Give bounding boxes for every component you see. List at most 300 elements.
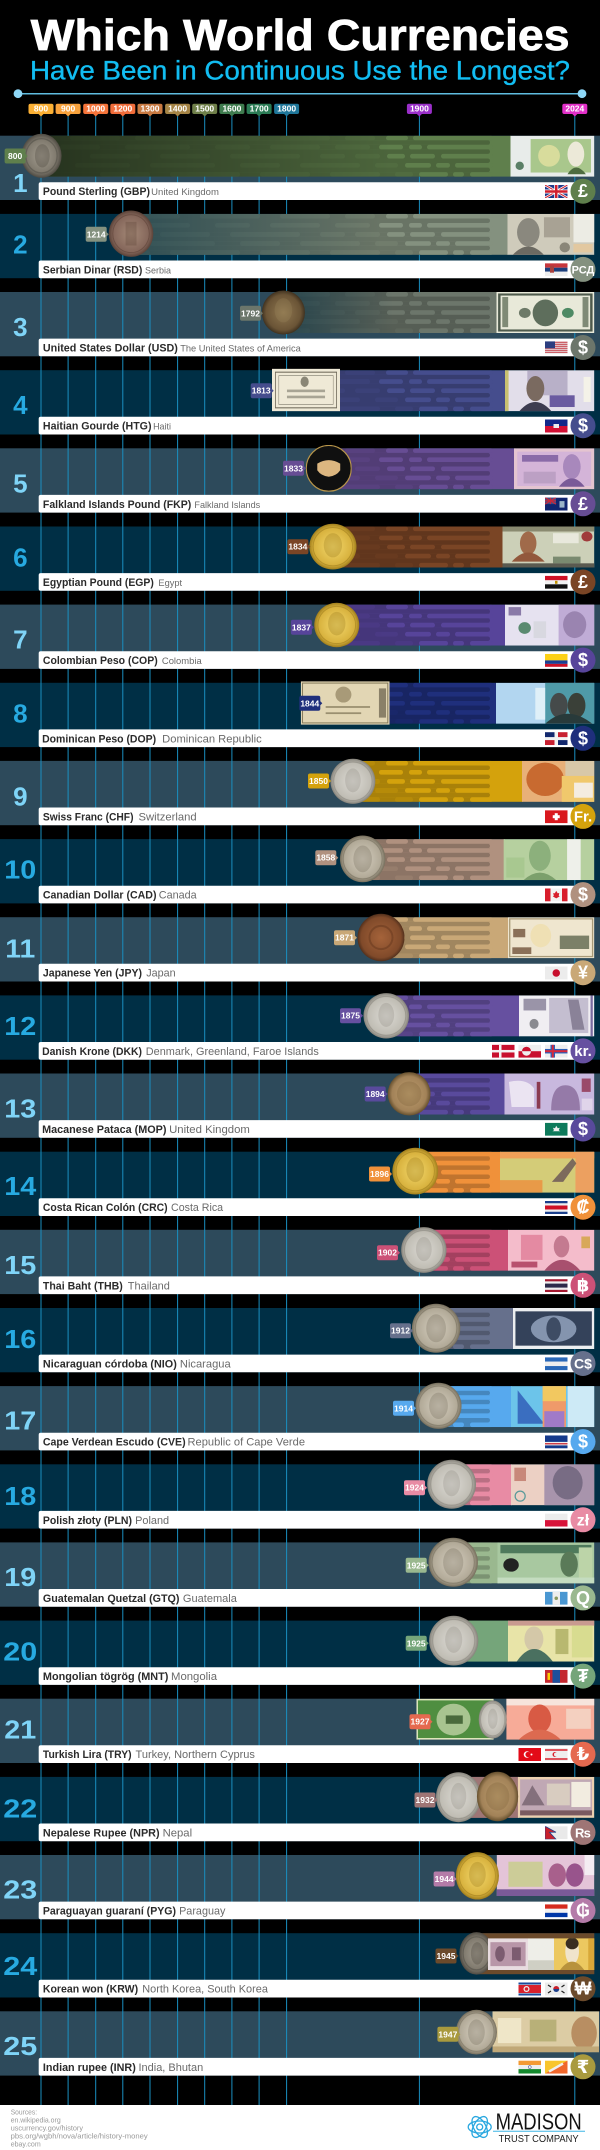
country: Egypt (158, 578, 182, 589)
rank number: 8 (13, 699, 28, 729)
timeline year tags: 1900 (410, 104, 429, 114)
label bar (39, 2054, 595, 2079)
currency name: Egyptian Pound (EGP) (43, 577, 154, 589)
row 7: Colombian Peso (0, 603, 600, 673)
currency name: Falkland Islands Pound (FKP) (43, 499, 192, 511)
bar (372, 839, 505, 880)
currency name: Serbian Dinar (RSD) (43, 264, 143, 276)
country: United Kingdom (169, 1124, 250, 1136)
timeline year tags: 1000 (86, 104, 105, 114)
row 2: Serbian Dinar (0, 210, 600, 282)
bar (140, 214, 508, 255)
timeline year tags (28, 104, 587, 116)
label bar (39, 1664, 595, 1689)
flag (545, 732, 568, 745)
coin (459, 1932, 494, 1975)
currency name: Cape Verdean Escudo (CVE) (43, 1437, 186, 1449)
year tag: 1792 (241, 308, 260, 318)
bar (448, 1386, 512, 1428)
currency name: Polish złoty (PLN) (43, 1515, 132, 1527)
year tag: 1813 (252, 386, 271, 396)
rank number: 9 (13, 781, 28, 811)
rank number: 25 (3, 2031, 37, 2061)
country: North Korea, South Korea (142, 1984, 269, 1996)
currency symbol (570, 335, 596, 360)
row 6: Egyptian Pound (0, 524, 600, 594)
flag (545, 341, 568, 354)
coin (357, 914, 405, 961)
currency name: Danish Krone (DKK) (42, 1046, 142, 1058)
country: Republic of Cape Verde (188, 1437, 305, 1449)
year tag: 800 (8, 151, 22, 161)
flag (545, 1123, 568, 1136)
row 23: Paraguayan guaraní (3, 1852, 596, 1923)
year tag (240, 306, 263, 321)
currency symbol: Fr. (574, 808, 592, 825)
year tag: 1833 (284, 463, 303, 473)
bar (453, 1621, 509, 1662)
banknote (504, 839, 594, 880)
currency symbol: ₮ (578, 1666, 588, 1686)
sources: ebay.com (11, 2140, 41, 2148)
year tag: 1914 (394, 1403, 413, 1413)
currency name: Guatemalan Quetzal (GTQ) (43, 1593, 180, 1605)
timeline year tags: 1500 (195, 104, 214, 114)
first banknote (416, 1699, 494, 1740)
coin (412, 1304, 460, 1353)
logo wordmark: MADISON (496, 2108, 582, 2134)
coin (309, 524, 357, 570)
year tag (86, 227, 109, 242)
row 5: Falkland Islands Pound (0, 445, 600, 516)
flags (518, 2061, 568, 2074)
currency symbol (570, 179, 596, 204)
coin (314, 603, 359, 647)
banknote (505, 604, 594, 646)
coin (306, 445, 351, 491)
flag (545, 810, 568, 823)
country: Turkey, Northern Cyprus (136, 1749, 255, 1761)
year tag (287, 539, 310, 554)
rank number: 18 (4, 1481, 36, 1511)
currency name: Turkish Lira (TRY) (43, 1749, 132, 1761)
currency name: Nepalese Rupee (NPR) (43, 1827, 160, 1839)
year tag: 1858 (316, 853, 336, 863)
country: Guatemala (183, 1593, 238, 1605)
timeline year tags: 1800 (277, 104, 296, 114)
label bar (39, 726, 595, 751)
banknotes (488, 1938, 594, 1970)
currency symbol (570, 804, 596, 829)
currency symbol: ¥ (578, 963, 588, 983)
sources: en.wikipedia.org (11, 2115, 61, 2124)
year tag (434, 1872, 457, 1886)
flag (545, 966, 568, 980)
year tag (436, 1948, 458, 1964)
country: Denmark, Greenland, Faroe Islands (146, 1046, 319, 1058)
year tag (404, 1480, 427, 1495)
sources (11, 2107, 148, 2148)
currency name: Nicaraguan córdoba (NIO) (43, 1358, 177, 1370)
year tag: 1912 (391, 1326, 410, 1336)
rank number: 10 (4, 854, 36, 884)
rank number: 2 (13, 230, 28, 260)
year tag: 1871 (335, 933, 354, 943)
bar (416, 1074, 504, 1114)
year tag: 1894 (366, 1089, 385, 1099)
first banknote (300, 681, 390, 725)
rank number: 17 (4, 1405, 36, 1435)
banknote (511, 1386, 594, 1428)
rank number: 20 (3, 1637, 37, 1667)
logo tagline: TRUST COMPANY (499, 2134, 579, 2145)
label bar (39, 570, 595, 594)
label bar (39, 1585, 595, 1610)
label bar (39, 491, 595, 516)
currency symbol: ₲ (576, 1900, 590, 1920)
label bar (39, 1507, 595, 1532)
year tag: 1214 (87, 229, 106, 239)
year tag: 1932 (416, 1795, 435, 1805)
rank number: 14 (4, 1171, 37, 1201)
rank number: 5 (13, 468, 28, 498)
flags (518, 1982, 568, 1996)
label bar (39, 179, 595, 204)
currency name: Pound Sterling (GBP) (43, 186, 150, 198)
year tag: 1834 (288, 542, 308, 552)
rank number: 22 (3, 1793, 37, 1823)
label bar (39, 1273, 595, 1298)
flag (545, 888, 568, 901)
coin (330, 759, 375, 804)
label bar (39, 960, 595, 985)
sources: pbs.org/wgbh/nova/article/history-money (11, 2132, 148, 2140)
country: Nepal (163, 1827, 192, 1839)
currency name: Paraguayan guaraní (PYG) (43, 1906, 176, 1918)
label bar (39, 804, 595, 829)
rank number: 15 (4, 1250, 36, 1280)
currency symbol: ₨ (575, 1825, 591, 1840)
currency symbol: ₩ (574, 1979, 592, 1999)
flag (545, 1279, 568, 1292)
currency symbol (570, 648, 596, 673)
coin (109, 210, 153, 257)
year tag (369, 1166, 392, 1182)
banknote (496, 682, 594, 724)
banknote (497, 1855, 594, 1896)
currency name: Japanese Yen (JPY) (43, 968, 142, 980)
year tag: 1925 (407, 1638, 426, 1648)
rank number: 4 (13, 390, 28, 420)
currency name: United States Dollar (USD) (43, 342, 178, 354)
row 13: Macanese Pataca (0, 1072, 600, 1142)
currency symbol (570, 726, 596, 751)
coin (429, 1538, 478, 1587)
banknote (508, 1230, 594, 1271)
currency symbol (570, 2054, 596, 2079)
currency name: Mongolian tögrög (MNT) (43, 1671, 169, 1683)
row 22: Nepalese Rupee (3, 1772, 596, 1845)
rank number: 3 (13, 312, 28, 342)
flag (545, 498, 568, 511)
year tag (299, 696, 322, 711)
year tag (291, 620, 314, 635)
rank number: 23 (3, 1874, 37, 1904)
flag (545, 576, 568, 589)
currency symbol: ₡ (576, 1197, 590, 1217)
banknote (508, 1621, 594, 1662)
bar (424, 1152, 501, 1193)
currency symbol (570, 1507, 596, 1532)
currency symbol: ₺ (577, 1744, 590, 1764)
country: United Kingdom (151, 187, 219, 198)
currency symbol (570, 491, 596, 516)
currency symbol: $ (578, 1432, 588, 1452)
country: Switzerland (138, 811, 197, 823)
year tag: 1924 (405, 1483, 424, 1493)
timeline rule (14, 89, 586, 98)
currency symbol (570, 1664, 596, 1689)
currency symbol: ฿ (577, 1275, 589, 1295)
logo: Madison Trust Company (468, 2108, 585, 2145)
coin (456, 1852, 499, 1900)
banknote (506, 1699, 594, 1740)
flag (545, 1435, 568, 1448)
timeline year tags: 1300 (141, 104, 160, 114)
row 11: Japanese Yen (0, 914, 600, 985)
timeline year tags: 2024 (565, 104, 585, 114)
banknote (514, 448, 594, 490)
flag (545, 1514, 568, 1527)
currency symbol: zł (577, 1512, 590, 1529)
label bar (39, 335, 595, 360)
banknote (498, 1542, 594, 1584)
label bar (39, 1742, 595, 1767)
timeline year tags: 1200 (113, 104, 133, 114)
year tag: 1945 (437, 1951, 456, 1961)
row 17: Cape Verdean Escudo (0, 1383, 600, 1454)
country: Dominican Republic (162, 733, 262, 745)
banknote (496, 292, 594, 333)
banknote (502, 526, 594, 568)
bar (390, 682, 500, 724)
coin (363, 993, 409, 1039)
flags (492, 1045, 568, 1058)
currency symbol (570, 1585, 596, 1610)
country: Colombia (162, 656, 202, 667)
logo rule (493, 2130, 585, 2132)
flag (545, 420, 568, 432)
currency name: Haitian Gourde (HTG) (43, 421, 152, 433)
currency symbol: $ (578, 728, 588, 748)
row 25: Indian rupee (3, 2010, 599, 2079)
logo icon (468, 2114, 491, 2140)
label bar (39, 1351, 595, 1376)
banknote (504, 1074, 594, 1114)
label bar (39, 1820, 595, 1845)
timeline year tags: 800 (34, 104, 48, 114)
country: Serbia (145, 265, 172, 276)
bar (346, 604, 507, 646)
banknote (510, 136, 594, 177)
bar (466, 1542, 499, 1584)
currency symbol: £ (578, 572, 588, 592)
year tag: 1944 (435, 1874, 454, 1884)
rank number: 24 (3, 1951, 38, 1981)
currency symbol: $ (578, 338, 588, 358)
sources: Sources: (11, 2107, 37, 2116)
row 1: Pound Sterling (0, 134, 600, 204)
row 10: Canadian Dollar (0, 835, 600, 907)
year tag: 1837 (292, 622, 311, 632)
year tag (406, 1558, 429, 1573)
rank number: 11 (5, 933, 35, 963)
banknote (508, 214, 594, 255)
year tag (334, 930, 357, 945)
row 24: Korean won (3, 1932, 596, 2001)
year tag (308, 774, 331, 788)
currency symbol (570, 1429, 596, 1454)
rank number: 21 (4, 1714, 36, 1744)
country: Nicaragua (180, 1358, 232, 1370)
coin (415, 1383, 462, 1429)
banknote (522, 760, 594, 802)
currency symbol (570, 882, 596, 907)
currency symbol: Q (576, 1588, 590, 1608)
country: Falkland Islands (194, 500, 260, 511)
year tag: 1850 (309, 776, 328, 786)
row 14: Costa Rican Colón (0, 1148, 600, 1220)
label bar (39, 1976, 595, 2001)
year tag (5, 148, 28, 164)
row 15: Thai Baht (0, 1227, 600, 1298)
currency name: Swiss Franc (CHF) (43, 811, 134, 823)
year tag: 1902 (378, 1248, 397, 1258)
year tag: 1896 (370, 1169, 389, 1179)
bar (396, 995, 520, 1036)
country: Costa Rica (171, 1202, 224, 1214)
flag (545, 185, 568, 198)
flag (545, 1904, 568, 1917)
year tag: 1925 (407, 1560, 426, 1570)
year tag: 1927 (411, 1717, 430, 1727)
year tag (315, 850, 338, 865)
currency symbol (570, 1038, 596, 1063)
year tag (410, 1714, 432, 1729)
bar (433, 1230, 509, 1271)
timeline year tags: 1600 (222, 104, 242, 114)
country: The United States of America (180, 344, 301, 354)
flag (545, 654, 568, 667)
currency symbol (570, 257, 596, 282)
banknote (513, 1308, 594, 1349)
banknote (500, 1152, 594, 1193)
timeline year tags: 1400 (168, 104, 187, 114)
rank number: 1 (13, 168, 28, 198)
flag (545, 1826, 568, 1839)
label bar (39, 1898, 595, 1923)
label bar (39, 648, 595, 673)
currency symbol (570, 1351, 596, 1376)
year tag: 1875 (341, 1011, 360, 1021)
coin (427, 1460, 476, 1509)
year tag (340, 1008, 363, 1023)
year tag (283, 461, 306, 476)
rank number: 12 (4, 1011, 36, 1041)
currency symbol: kr. (574, 1043, 592, 1060)
label bar (39, 1038, 595, 1063)
currency symbol (570, 1273, 596, 1298)
rank number: 16 (4, 1324, 36, 1354)
currency symbol (570, 1820, 596, 1845)
subtitle: Have Been in Continuous Use the Longest?: Have Been in Continuous Use the Longest? (30, 56, 570, 86)
coin (429, 1616, 478, 1665)
currency symbol (570, 570, 596, 594)
currency symbol: $ (578, 650, 588, 670)
label bar (39, 413, 595, 438)
currency name: Canadian Dollar (CAD) (43, 890, 157, 902)
row 18: Polish złoty (0, 1460, 600, 1532)
year tag (390, 1323, 413, 1338)
row 3: United States Dollar (0, 290, 600, 360)
currency name: Colombian Peso (COP) (43, 655, 158, 667)
bar (342, 526, 502, 568)
bar (449, 1308, 513, 1349)
rank number: 7 (13, 625, 28, 655)
currency symbol (570, 1976, 596, 2001)
bar (458, 1777, 519, 1818)
currency symbol: $ (578, 1119, 588, 1139)
currency symbol: ₹ (577, 2057, 589, 2077)
footer panel (0, 2105, 600, 2150)
rank number: 6 (13, 543, 28, 573)
coin (479, 1700, 507, 1739)
bar (306, 370, 506, 412)
currency symbol (570, 960, 596, 985)
currency symbol (570, 1195, 596, 1220)
label bar (39, 1195, 595, 1220)
sources: uscurrency.gov/history (11, 2123, 83, 2132)
row 21: Turkish Lira (4, 1699, 596, 1767)
coin (388, 1072, 431, 1116)
bar (476, 1933, 594, 1974)
title: Which World Currencies: Which World Currencies (31, 11, 570, 60)
bar (464, 1464, 512, 1506)
currency symbol: £ (578, 181, 588, 201)
flag (545, 1592, 568, 1605)
coin (392, 1148, 438, 1195)
currency symbol: $ (578, 885, 588, 905)
row 8: Dominican Peso (0, 681, 600, 751)
coin (21, 134, 62, 178)
flag (545, 1201, 568, 1214)
timeline year tags: 1700 (250, 104, 269, 114)
flag (545, 1670, 568, 1683)
year tag (406, 1636, 429, 1651)
country: Thailand (128, 1280, 170, 1292)
currency symbol (570, 1742, 596, 1767)
country: India, Bhutan (138, 2062, 203, 2074)
bar (48, 136, 511, 177)
coin (401, 1227, 447, 1273)
currency symbol (570, 1116, 596, 1142)
banknote (519, 995, 594, 1036)
currency name: Thai Baht (THB) (43, 1280, 123, 1292)
row 20: Mongolian tögrög (3, 1616, 596, 1689)
country: Poland (135, 1515, 169, 1527)
label bar (39, 1116, 595, 1142)
first banknote (272, 368, 340, 412)
